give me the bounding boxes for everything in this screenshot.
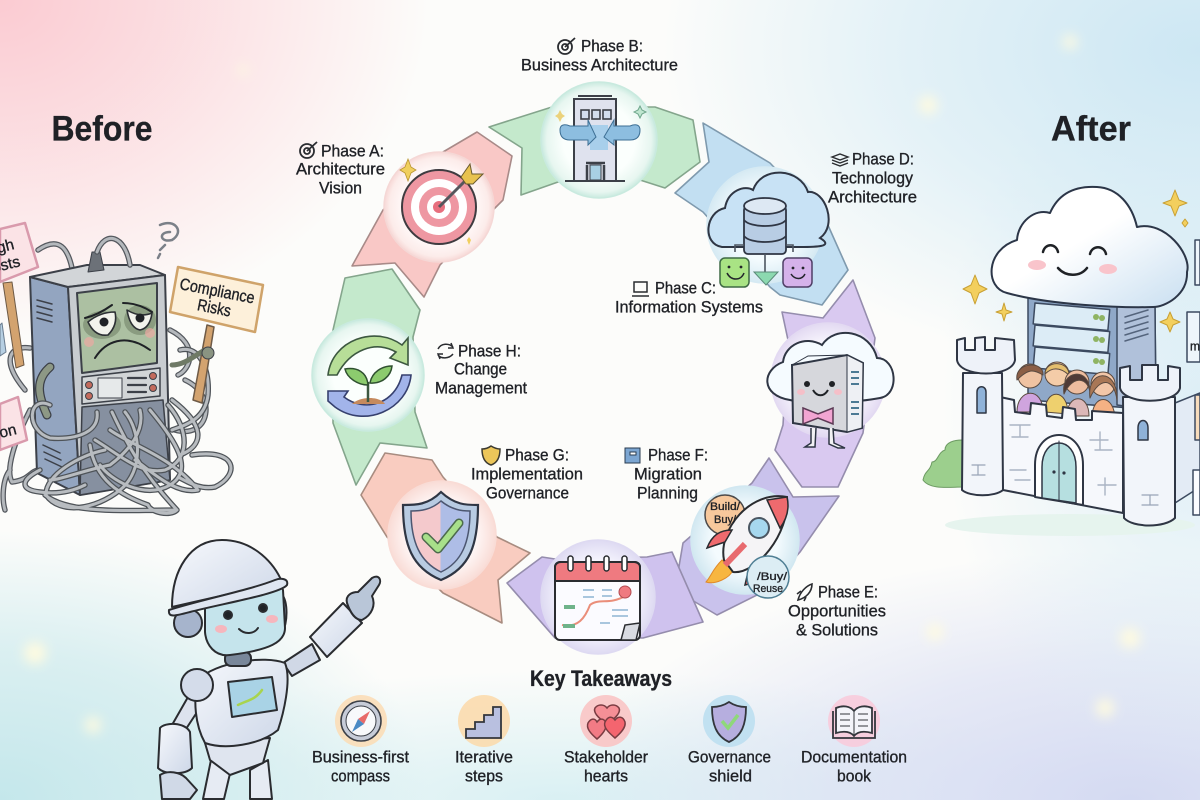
tangle of cables (25, 349, 231, 513)
label: Phase G (471, 445, 583, 502)
sign: pink clipped (0, 397, 27, 450)
pelvis (205, 738, 270, 775)
icon: stairs (458, 695, 510, 747)
neck (225, 652, 251, 666)
label: Phase B: Business Architecture (521, 55, 678, 74)
label: Phase B (521, 36, 678, 74)
arrow segment: Phase E rocket (675, 458, 839, 615)
arrow segment: Phase G shield (361, 453, 530, 623)
sign: High Costs (clipped) (0, 223, 38, 368)
sign: Compliance Risks (170, 267, 263, 403)
node: Phase H sprout with cycle arrows (312, 319, 424, 431)
arrow segment: Phase B (489, 107, 700, 195)
takeaway: Governance shield: Governance (688, 748, 771, 766)
people on the wall (1017, 362, 1117, 420)
torso (195, 660, 288, 746)
heading: Before: Before (52, 109, 152, 148)
takeaway: Stakeholder hearts (564, 695, 648, 785)
icon: blue window (625, 448, 640, 463)
right wing wall (1175, 393, 1200, 503)
node: Phase F calendar (541, 540, 655, 654)
heading: Key Takeaways: Key Takeaways (530, 666, 672, 691)
node: Phase A target (384, 152, 494, 262)
cloud (992, 187, 1188, 307)
takeaway: Governance shield: shield (709, 767, 752, 785)
label: Phase H: Change (454, 359, 507, 378)
cables behind the server (3, 244, 206, 510)
label: Phase B: Phase B: (581, 36, 643, 55)
label: Phase D: Architecture (828, 187, 917, 206)
label: Phase G: Phase G: (505, 445, 569, 464)
node: Phase C information cloud (707, 167, 829, 287)
lower port panel (80, 400, 170, 495)
arrow segment: Phase C/D (675, 123, 848, 305)
illustration: sad legacy server tangled in cables (0, 223, 263, 513)
node: Phase E rocket: Build/ (710, 501, 741, 513)
node: Phase D server in cloud (767, 323, 894, 448)
cycle ring of arrow segments (333, 107, 875, 638)
hard hat (172, 540, 282, 607)
sad screen face (77, 283, 157, 373)
server top (30, 265, 165, 287)
label: Phase H: Phase H: (458, 341, 521, 360)
takeaway: Business-first compass (312, 695, 409, 785)
label: Phase C (615, 278, 763, 316)
label: Phase G: Governance (486, 483, 569, 502)
icon: shield (703, 695, 755, 747)
node: Phase E rocket: /Buy/ (757, 571, 788, 583)
icon: open book (828, 695, 880, 747)
takeaway: Business-first compass: Business-first (312, 748, 409, 766)
question squiggle (158, 223, 178, 258)
label: Phase F: Planning (637, 483, 698, 502)
node: Phase G shield (388, 481, 496, 589)
takeaway: Business-first compass: compass (331, 767, 390, 785)
takeaway: Stakeholder hearts: hearts (584, 767, 628, 785)
takeaway: Documentation book: book (837, 767, 872, 785)
door (1035, 435, 1083, 505)
icon: target (300, 142, 317, 158)
icon: target small (558, 38, 575, 54)
label: Phase F: Migration (634, 464, 702, 483)
label: Phase F: Phase F: (648, 445, 708, 464)
label: Phase E (788, 582, 886, 639)
label: Phase E: Phase E: (818, 582, 878, 601)
takeaway: Governance shield (688, 695, 771, 785)
label: Phase D (828, 149, 917, 206)
takeaway: Documentation book: Documentation (801, 748, 907, 766)
label: Phase A (296, 141, 385, 197)
label: Phase G: Implementation (471, 464, 583, 483)
sign: Compliance Risks: Compliance (178, 275, 256, 307)
left arm (172, 690, 205, 732)
icon: hearts (580, 695, 632, 747)
ear (174, 609, 202, 637)
control panel (82, 368, 160, 404)
node: Phase E rocket (691, 486, 799, 598)
server front (68, 275, 170, 495)
takeaway: Documentation book (801, 695, 907, 785)
legs (203, 755, 272, 799)
sparkles (963, 190, 1188, 332)
icon: cycle arrows (438, 343, 453, 359)
heading: After: After (1051, 109, 1131, 148)
label: Phase C: Information Systems (615, 297, 763, 316)
arrow segment: Phase H (333, 269, 427, 485)
server tower (1028, 298, 1156, 410)
vent slits (37, 300, 62, 467)
takeaway: Iterative steps: steps (465, 767, 503, 785)
label: Phase C: Phase C: (655, 278, 716, 297)
small cable arm (40, 367, 50, 415)
label: Phase E: & Solutions (796, 620, 878, 639)
right arm (283, 644, 320, 676)
head (205, 585, 285, 655)
icon: laptop (632, 282, 649, 296)
icon: compass (335, 695, 387, 747)
sign: Compliance Risks: Risks (196, 296, 233, 320)
ground glow (945, 514, 1195, 536)
label: Phase A: Architecture (296, 159, 385, 178)
takeaway: Iterative steps (455, 695, 513, 785)
label: Phase H (435, 341, 527, 397)
node: Phase E rocket: Reuse (753, 583, 783, 595)
label: Phase D: Technology (832, 168, 913, 187)
icon: small rocket (797, 584, 812, 601)
left tower (957, 337, 1015, 495)
label: Phase A: Phase A: (321, 141, 384, 160)
takeaway: Iterative steps: Iterative (455, 748, 513, 766)
node: Phase E rocket: Buy/ (714, 514, 737, 526)
illustration: happy cloud castle (923, 187, 1200, 536)
clipped signs on right edge (1187, 240, 1200, 515)
illustration: robot guide in hard hat (158, 540, 380, 799)
bush (923, 440, 962, 487)
server side panel (30, 277, 80, 495)
arrow segment: Phase A (352, 132, 512, 297)
arrow segment: Phase E cloud (775, 280, 875, 487)
sign: blue clipped (0, 323, 6, 356)
takeaway: Stakeholder hearts: Stakeholder (564, 748, 648, 766)
icon: gold shield (482, 446, 500, 465)
node: Phase B building (541, 82, 657, 198)
arrow segment: Phase F calendar (507, 552, 703, 638)
right tower (1120, 365, 1180, 526)
icon: stack layers (832, 154, 848, 166)
label: Phase H: Management (435, 378, 527, 397)
label: Phase A: Vision (319, 178, 362, 197)
chest screen (228, 677, 277, 717)
top cable plug (88, 252, 104, 272)
label: Phase D: Phase D: (852, 149, 914, 168)
castle wall (1000, 397, 1123, 513)
label: Phase E: Opportunities (788, 601, 886, 620)
label: Phase F (625, 445, 708, 502)
